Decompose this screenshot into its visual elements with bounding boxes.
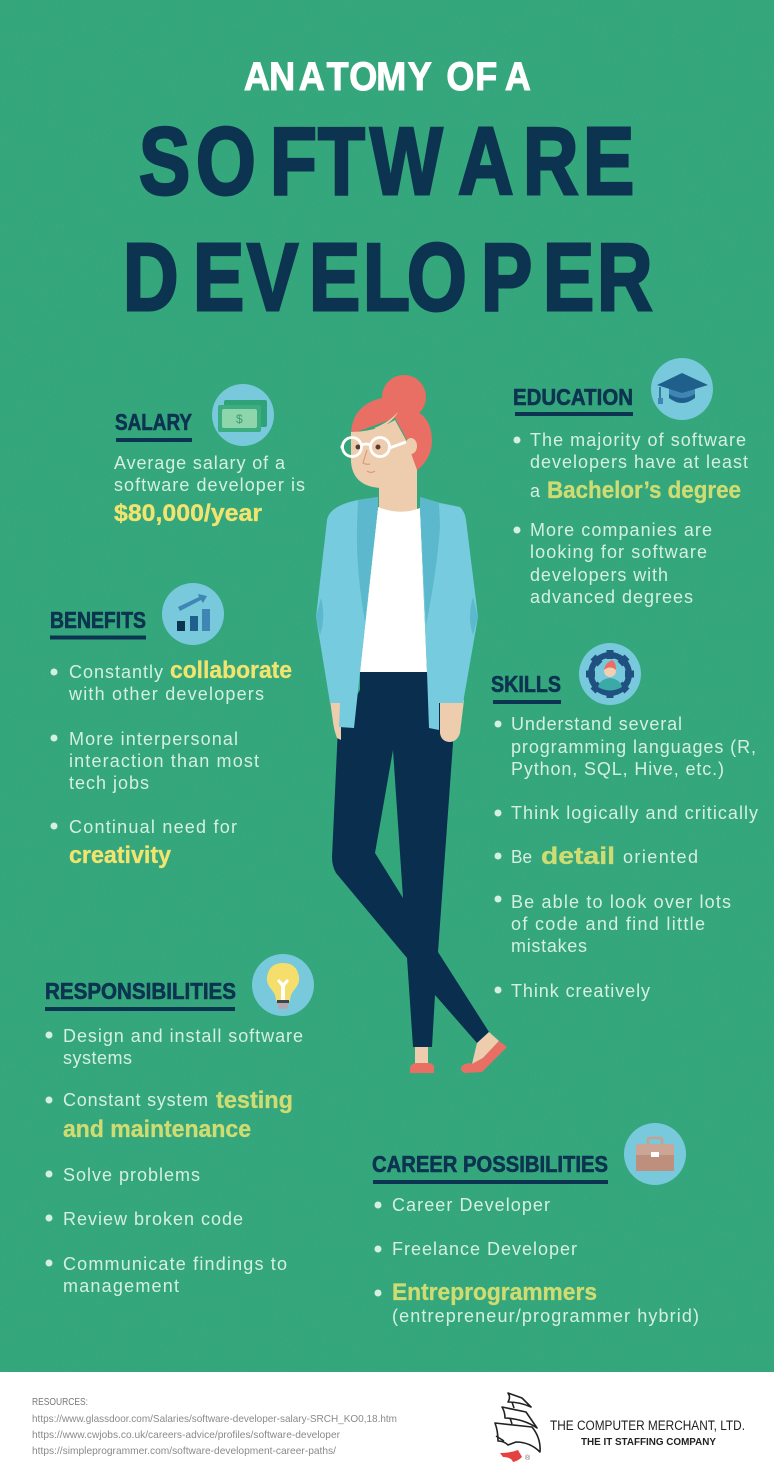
jacket right lapel (420, 497, 440, 625)
skills list: of code and find little (511, 914, 705, 934)
responsibilities list: testing (216, 1087, 293, 1114)
salary text: Average salary of a (114, 453, 286, 473)
left shoe (410, 1063, 434, 1073)
responsibilities list: and maintenance (63, 1116, 251, 1143)
education list (514, 430, 748, 607)
jacket left panel (316, 497, 378, 728)
illustration: woman developer (316, 375, 507, 1073)
benefits list: collaborate (170, 657, 292, 684)
hair bun (382, 375, 426, 419)
responsibilities list: Review broken code (63, 1209, 243, 1229)
heading: responsibilities: RESPONSIBILITIES (45, 978, 236, 1004)
mouth and nose (363, 450, 375, 472)
responsibilities list: systems (63, 1048, 132, 1068)
resources list: https://www.cwjobs.co.uk/careers-advice/profiles/software-developer (32, 1429, 340, 1441)
right elbow patch (470, 597, 478, 635)
gap between legs (375, 750, 403, 898)
heading: education: EDUCATION (513, 384, 633, 410)
education list: developers have at least (530, 452, 748, 472)
salary text: software developer is (114, 475, 305, 495)
responsibilities list (46, 1026, 303, 1296)
icon: banknotes: $ (236, 412, 243, 426)
title line: developer: DEVELOPER (123, 224, 653, 331)
heading: benefits: BENEFITS (50, 607, 146, 633)
panel: skills (491, 643, 758, 1001)
resources list: https://www.glassdoor.com/Salaries/software-developer-salary-SRCH_KO0,18.htm (32, 1413, 397, 1425)
education list: Bachelor’s degree (547, 477, 741, 504)
eyes (356, 444, 380, 450)
left hand (330, 700, 341, 740)
education list: More companies are (530, 520, 712, 540)
career list: Freelance Developer (392, 1239, 577, 1259)
right shoe (461, 1041, 507, 1073)
icon: briefcase (624, 1123, 686, 1185)
skills list: oriented (623, 847, 698, 867)
benefits list: More interpersonal (69, 729, 238, 749)
responsibilities list: Constant system (63, 1090, 208, 1110)
legs and trousers (332, 672, 489, 1047)
heading underline (515, 412, 633, 416)
career list: Entreprogrammers (392, 1279, 597, 1306)
title (123, 55, 653, 331)
career list (374, 1195, 699, 1326)
skills list: Be (511, 847, 532, 867)
benefits list: interaction than most (69, 751, 259, 771)
heading underline (373, 1180, 608, 1184)
footer (0, 1372, 774, 1482)
title line: anatomy of a: ANATOMY OF A (244, 55, 531, 99)
company tagline: THE IT STAFFING COMPANY (581, 1436, 716, 1448)
panel: education (513, 358, 748, 607)
skills list: Python, SQL, Hive, etc.) (511, 759, 724, 779)
responsibilities list: Communicate findings to (63, 1254, 287, 1274)
icon: banknotes (212, 384, 274, 446)
skills list: mistakes (511, 936, 587, 956)
company name: THE COMPUTER MERCHANT, LTD. (550, 1418, 745, 1433)
skills list: Understand several (511, 714, 682, 734)
heading underline (45, 1007, 235, 1011)
fringe streak (374, 412, 398, 429)
hair (351, 396, 432, 472)
panel: career possibilities (372, 1123, 699, 1326)
heading underline (493, 700, 561, 704)
responsibilities list: Design and install software (63, 1026, 303, 1046)
jacket left lapel (357, 497, 378, 622)
skills list: Think creatively (511, 981, 650, 1001)
skills list: detail (541, 843, 615, 870)
right hand (440, 700, 464, 742)
salary text (114, 453, 305, 527)
benefits list: with other developers (68, 684, 264, 704)
icon: gear with person (579, 643, 641, 705)
salary text: $80,000/year (114, 500, 262, 527)
left elbow patch (316, 598, 323, 635)
heading underline (50, 636, 146, 640)
white shirt (360, 507, 427, 672)
panel: benefits (50, 583, 292, 869)
education list: looking for software (530, 542, 707, 562)
resources list: https://simpleprogrammer.com/software-development-career-paths/ (32, 1445, 336, 1457)
benefits list: Continual need for (69, 817, 237, 837)
benefits list: creativity (69, 842, 172, 869)
logo: ship (495, 1393, 540, 1462)
skills list (494, 714, 758, 1001)
title line: software: SOFTWARE (139, 108, 634, 215)
ear (405, 438, 417, 454)
logo: registered mark: ® (525, 1454, 531, 1462)
benefits list: tech jobs (69, 773, 149, 793)
icon: light bulb (252, 954, 314, 1016)
panel: salary (114, 384, 305, 527)
benefits list (50, 657, 292, 869)
heading underline (116, 438, 192, 442)
skills list: Be able to look over lots (511, 892, 731, 912)
right foot (472, 1032, 499, 1064)
heading: salary: SALARY (115, 409, 192, 435)
icon: graduation cap (651, 358, 713, 420)
face (351, 420, 417, 488)
skills list: programming languages (R, (511, 737, 756, 757)
panel: responsibilities (45, 954, 314, 1296)
icon: rising bar chart (162, 583, 224, 645)
education list: advanced degrees (530, 587, 693, 607)
education list: a (530, 481, 541, 501)
career list: Career Developer (392, 1195, 550, 1215)
heading: career possibilities: CAREER POSSIBILITIES (372, 1151, 608, 1177)
education list: developers with (530, 565, 668, 585)
responsibilities list: Solve problems (63, 1165, 200, 1185)
resources list (32, 1396, 397, 1457)
career list: (entrepreneur/programmer hybrid) (392, 1306, 699, 1326)
responsibilities list: management (63, 1276, 179, 1296)
education list: The majority of software (530, 430, 746, 450)
left foot (415, 1047, 428, 1064)
glasses (340, 438, 406, 456)
neck (379, 470, 417, 512)
heading: skills: SKILLS (491, 671, 561, 697)
benefits list: Constantly (69, 662, 163, 682)
skills list: Think logically and critically (511, 803, 758, 823)
jacket right panel (420, 497, 478, 730)
resources list: RESOURCES: (32, 1396, 88, 1408)
